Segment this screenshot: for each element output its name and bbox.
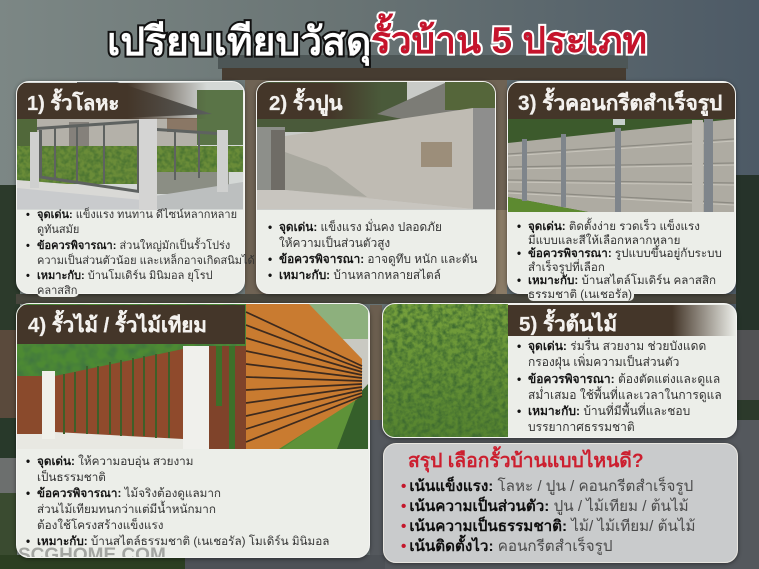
summary list: •เน้นแข็งแรง: โลหะ / ปูน / คอนกรีตสำเร็จรูป [401,478,693,495]
panel: 4 wood fence: • [26,455,30,468]
summary list: •เน้นติดตั้งไว: คอนกรีตสำเร็จรูป [401,538,612,555]
bullet text: ส่วนไม้เทียมทนกว่าแต่มีน้ำหนักมาก [37,503,216,516]
bullet text: ข้อควรพิจารณา: รูปแบบขึ้นอยู่กับระบบ [528,247,722,260]
bullet text: ธรรมชาติ (เนเชอรัล) [528,288,632,300]
title [107,11,648,68]
bullet text: ข้อควรพิจารณา: ต้องตัดแต่งและดูแล [528,372,720,386]
bullet text: ให้ความเป็นส่วนตัวสูง [279,236,390,250]
bullet text: บรรยากาศธรรมชาติ [528,420,635,434]
bullet text [517,218,722,301]
panel: 1 metal fence: • [26,240,30,252]
header bar [257,83,382,119]
panel: 4 wood fence [16,303,370,558]
bullet text: มีแบบและสีให้เลือกหลากหลาย [528,234,680,246]
panel: 2 concrete fence: • [268,220,272,234]
bullet text: เหมาะกับ: บ้านโมเดิร์น มินิมอล ยุโรป [37,270,213,282]
summary list: •เน้นความเป็นธรรมชาติ: ไม้/ ไม้เทียม/ ต้นไม้ [401,518,695,535]
bullet text: จุดเด่น: ร่มรื่น สวยงาม ช่วยบังแดด [528,339,706,353]
title: white part: เปรียบเทียบวัสดุ [107,21,371,64]
bullet text: กรองฝุ่น เพิ่มความเป็นส่วนตัว [528,355,679,369]
panel: 1 metal fence: • [26,209,30,221]
panel: 3 precast concrete fence: • [517,220,521,233]
title: red part: รั้วบ้าน 5 ประเภท [371,20,647,61]
panel: 4 wood fence: • [26,535,30,548]
panel: 4 wood fence: • [26,487,30,500]
panel: 2 concrete fence: • [268,252,272,266]
bullet text: ข้อควรพิจารณา: อาจดูทึบ หนัก และตัน [279,252,477,266]
bullet text [26,207,255,297]
bullet text [268,218,478,282]
bullet text [517,338,722,434]
panel: 3 precast concrete fence: • [517,247,521,260]
panel: 2 concrete fence [256,81,496,294]
bullet text: เหมาะกับ: บ้านที่มีพื้นที่และชอบ [528,404,690,418]
bullet text: ข้อควรพิจารณา: ส่วนใหญ่มักเป็นรั้วโปร่ง [37,240,230,252]
summary list: •เน้นความเป็นส่วนตัว: ปูน / ไม้เทียม / ต้นไม้ [401,498,689,515]
photo: wood fence [17,304,368,449]
bullet text: ข้อควรพิจารณา: ไม้จริงต้องดูแลมาก [37,487,221,500]
bullet text: คลาสสิก [37,285,77,297]
bullet text: ต้องใช้โครงสร้างแข็งแรง [37,519,163,532]
header bar [17,305,245,344]
bullet text: จุดเด่น: แข็งแรง ทนทาน ดีไซน์หลากหลาย [37,209,237,221]
panel: summary [383,443,738,563]
bullet text: สม่ำเสมอ ใช้พื้นที่และเวลาในการดูแล [528,388,722,402]
photo: hedge [383,304,508,437]
bullet text: สำเร็จรูปที่เลือก [528,260,605,274]
bullet text: ความเป็นส่วนตัวน้อย และเหล็กอาจเกิดสนิมได้ [37,255,255,267]
panel: 1 metal fence: • [26,270,30,282]
heading: 4) รั้วไม้ / รั้วไม้เทียม [28,315,207,337]
photo: concrete wall [257,82,495,210]
bullet text: จุดเด่น: ให้ความอบอุ่น สวยงาม [37,455,193,468]
panel: 5 hedge fence [382,303,737,438]
header bar [508,305,736,336]
panel: 5 hedge fence: • [517,404,521,418]
panel: 1 metal fence [16,81,245,294]
panel: 5 hedge fence: • [517,339,521,353]
heading: 5) รั้วต้นไม้ [519,313,617,336]
photo: precast fence [508,119,734,212]
header bar [508,83,737,119]
bullet text: เหมาะกับ: บ้านสไตล์ธรรมชาติ (เนเชอรัล) โมเดิร์น มินิมอล [37,535,329,548]
panel: 3 precast concrete fence: • [517,274,521,287]
bullet text: ดูทันสมัย [37,224,79,236]
panel: 5 hedge fence: • [517,372,521,386]
panel: 3 precast concrete fence [507,81,736,294]
bullet text: เป็นธรรมชาติ [37,471,106,484]
panel: 2 concrete fence: • [268,268,272,282]
bullet text: เหมาะกับ: บ้านสไตล์โมเดิร์น คลาสสิก [528,274,716,287]
bullet text: เหมาะกับ: บ้านหลากหลายสไตล์ [279,268,441,282]
bullet text: จุดเด่น: ติดตั้งง่าย รวดเร็ว แข็งแรง [528,220,700,233]
photo: metal fence [17,82,243,210]
heading: 2) รั้วปูน [269,92,342,115]
summary heading: สรุป เลือกรั้วบ้านแบบไหนดี? [408,451,644,472]
bullet text: จุดเด่น: แข็งแรง มั่นคง ปลอดภัย [279,220,442,234]
summary list [401,476,695,555]
heading: 1) รั้วโลหะ [27,93,119,115]
header bar [17,83,207,119]
heading: 3) รั้วคอนกรีตสำเร็จรูป [518,92,722,115]
bullet text [26,454,329,548]
